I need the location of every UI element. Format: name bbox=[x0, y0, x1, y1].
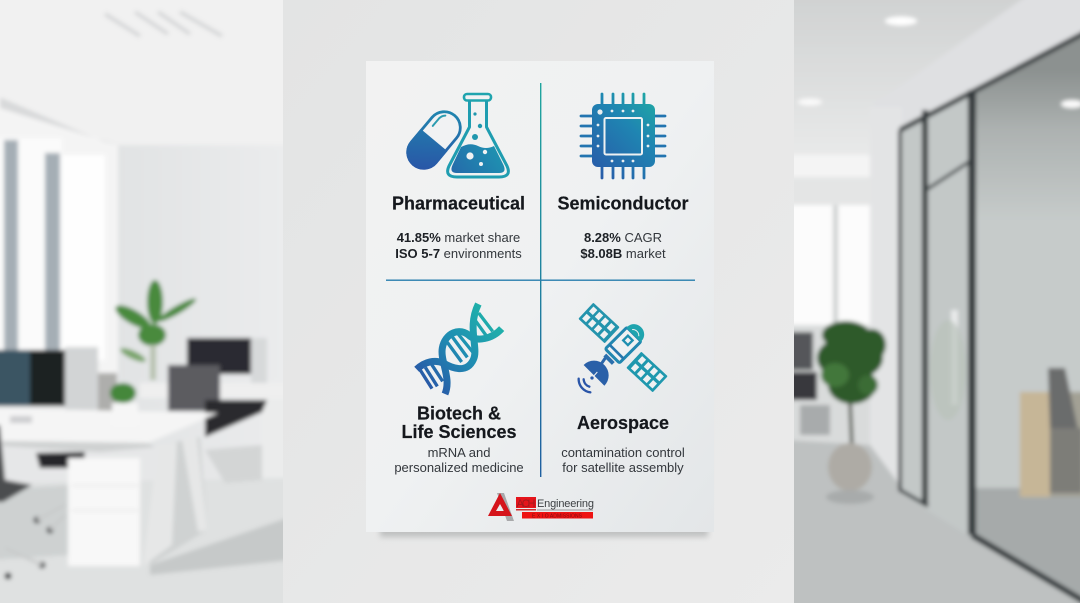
text: semiconductor CAGR: 8.28% CAGR bbox=[584, 230, 662, 245]
heading: Biotech and Life Sciences: Biotech & bbox=[417, 404, 501, 424]
icon: DNA helix bbox=[417, 304, 502, 394]
satellite body bbox=[602, 320, 648, 366]
background: blurred office left side bbox=[0, 0, 290, 603]
logo: ACH Engineering bbox=[488, 493, 594, 521]
dish bbox=[584, 355, 615, 386]
text: biotech description line two: personalized medicine bbox=[394, 460, 524, 475]
text: aerospace description: contamination control bbox=[561, 445, 685, 460]
logo: ACH Engineering: E X I O ADMISSIONS bbox=[532, 514, 583, 520]
text: aerospace description line two: for satellite assembly bbox=[562, 460, 684, 475]
text: ISO environments: ISO 5-7 environments bbox=[395, 246, 522, 261]
heading: Semiconductor: Semiconductor bbox=[557, 194, 689, 214]
horizontal divider bbox=[386, 280, 695, 281]
text: pharmaceutical stats: 41.85% market share bbox=[397, 230, 520, 245]
icon: satellite bbox=[578, 303, 668, 392]
panel: poster bbox=[366, 61, 714, 532]
background: central wall bbox=[283, 0, 794, 603]
solar panel lower bbox=[626, 352, 668, 392]
icon: capsule and flask bbox=[399, 94, 508, 177]
heading: Pharmaceutical: Pharmaceutical bbox=[392, 194, 525, 214]
logo: ACH Engineering: ACH bbox=[516, 498, 536, 510]
heading: Aerospace: Aerospace bbox=[577, 413, 669, 433]
text: semiconductor market: $8.08B market bbox=[580, 246, 666, 261]
text: biotech description: mRNA and bbox=[428, 445, 490, 460]
vertical divider bbox=[540, 83, 541, 477]
heading line two: Life Sciences bbox=[401, 422, 517, 442]
poster shadow bbox=[380, 100, 708, 537]
background: blurred office right side bbox=[785, 0, 1080, 603]
icon: microchip bbox=[581, 94, 665, 178]
logo: ACH Engineering: Engineering bbox=[537, 498, 594, 510]
solar panel upper bbox=[578, 303, 620, 343]
